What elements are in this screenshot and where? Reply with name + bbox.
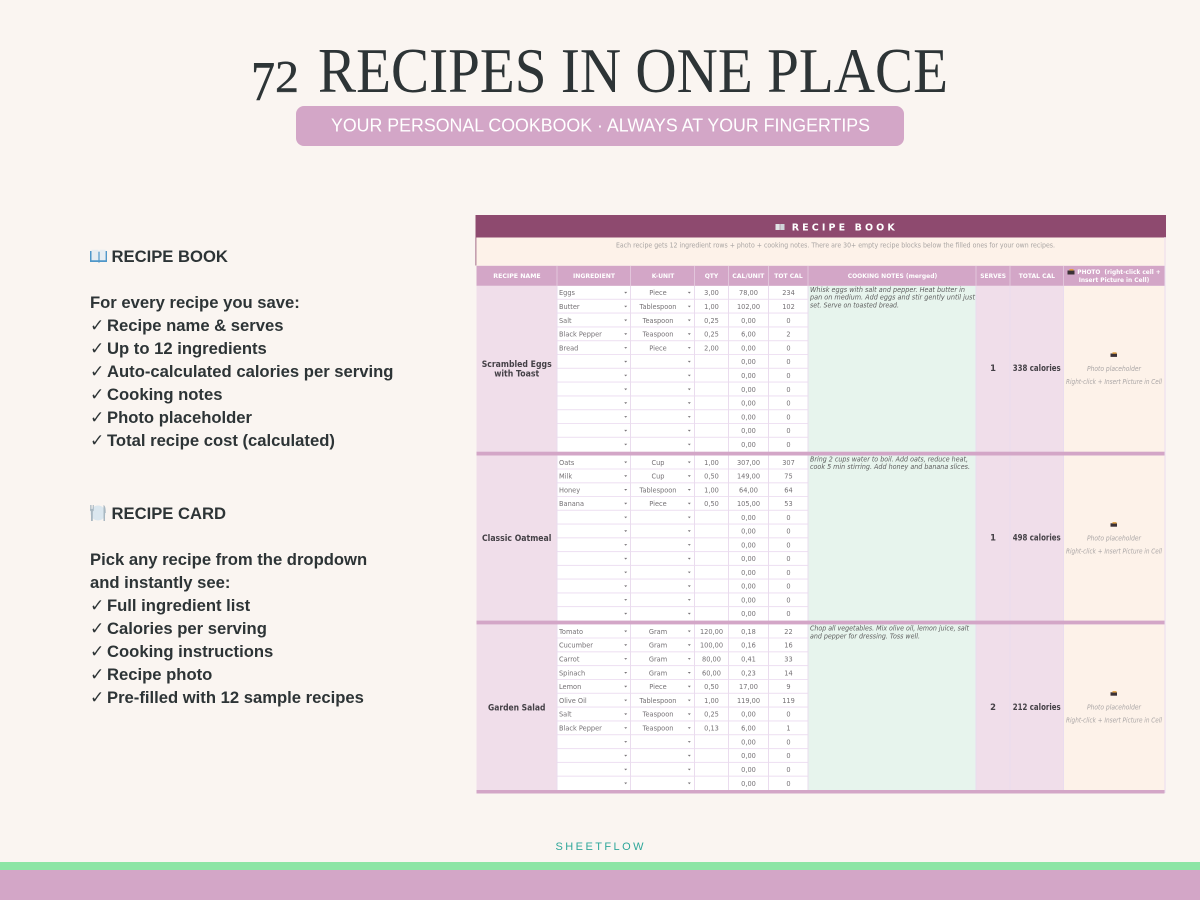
ingredient rows: 0,18 bbox=[741, 628, 756, 636]
ingredient rows: Eggs bbox=[559, 289, 576, 297]
text block: recipe book features: ✓ bbox=[90, 339, 104, 359]
ingredient rows: 0 bbox=[786, 569, 791, 577]
cooking notes bbox=[809, 286, 975, 309]
ingredient rows: Tomato bbox=[558, 628, 583, 636]
text block: recipe book features: Cooking notes bbox=[107, 385, 222, 404]
ingredient rows: Black Pepper bbox=[559, 331, 602, 339]
ingredient rows: Black Pepper bbox=[559, 724, 602, 732]
photo placeholder: Right-click + Insert Picture in Cell bbox=[1066, 716, 1162, 724]
recipe name bbox=[482, 359, 552, 379]
cooking notes: Bring 2 cups water to boil. Add oats, reduce heat, bbox=[810, 455, 968, 463]
text block: recipe book features: Recipe name & serves bbox=[107, 316, 284, 335]
ingredient rows: 0,50 bbox=[704, 473, 719, 481]
recipe block: scrambled eggs bbox=[482, 286, 1162, 449]
text block: recipe book features: Total recipe cost (calculated) bbox=[107, 431, 335, 450]
ingredient rows: 0,00 bbox=[741, 752, 756, 760]
serves and total calories: 1 bbox=[990, 363, 996, 373]
instruction note band: Each recipe gets 12 ingredient rows + photo + cooking notes. There are 30+ empty recipe blocks below the filled ones for your own recipes. bbox=[616, 241, 1055, 249]
ingredient rows: 17,00 bbox=[739, 683, 758, 691]
ingredient rows: Honey bbox=[559, 486, 580, 494]
ingredient rows: 0,00 bbox=[741, 528, 756, 536]
text block: recipe card features: ✓ bbox=[90, 665, 104, 685]
ingredient rows: Cup bbox=[652, 459, 664, 467]
ingredient rows: 14 bbox=[784, 669, 793, 677]
ingredient rows: 0 bbox=[786, 738, 791, 746]
table header row: CAL/UNIT bbox=[732, 273, 765, 280]
ingredient rows: Piece bbox=[649, 344, 667, 352]
ingredient rows: Lemon bbox=[559, 683, 581, 691]
ingredient rows: 0,00 bbox=[741, 413, 756, 421]
ingredient rows: Teaspoon bbox=[642, 331, 673, 339]
text block: recipe book features: ✓ bbox=[90, 408, 104, 428]
text block: recipe book features: ✓ bbox=[90, 431, 104, 451]
ingredient rows: 0,25 bbox=[704, 317, 719, 325]
ingredient rows: 0,25 bbox=[704, 711, 719, 719]
ingredient rows: 1 bbox=[786, 724, 791, 732]
photo placeholder: Photo placeholder bbox=[1087, 704, 1142, 712]
icon: fork and knife with plate bbox=[90, 505, 106, 521]
ingredient rows: 102,00 bbox=[737, 303, 760, 311]
ingredient rows: 0,00 bbox=[741, 711, 756, 719]
text block: recipe card features: Full ingredient list bbox=[107, 596, 251, 615]
ingredient rows: 0 bbox=[786, 528, 791, 536]
photo placeholder: Right-click + Insert Picture in Cell bbox=[1066, 378, 1162, 386]
ingredient rows: 1,00 bbox=[704, 303, 719, 311]
column backgrounds bbox=[476, 237, 1165, 793]
table header row: TOTAL CAL bbox=[1019, 273, 1055, 280]
ingredient rows: 0 bbox=[786, 780, 791, 788]
ingredient rows: 0,23 bbox=[741, 669, 756, 677]
ingredient rows: 119,00 bbox=[737, 697, 760, 705]
cooking notes: Whisk eggs with salt and pepper. Heat butter in bbox=[810, 286, 965, 294]
ingredient rows: 6,00 bbox=[741, 724, 756, 732]
title: 2 bbox=[275, 52, 299, 102]
ingredient rows: Oats bbox=[559, 459, 575, 467]
ingredient rows: 149,00 bbox=[737, 473, 760, 481]
cooking notes: and pepper for dressing. Toss well. bbox=[810, 632, 920, 640]
text block: recipe card features: and instantly see: bbox=[90, 573, 230, 592]
footer bands bbox=[0, 862, 1200, 900]
photo placeholder bbox=[1066, 352, 1162, 386]
ingredient rows: 0 bbox=[786, 583, 791, 591]
ingredient rows: 307 bbox=[782, 459, 795, 467]
serves and total calories bbox=[990, 532, 1061, 542]
recipe name: Classic Oatmeal bbox=[482, 533, 552, 543]
ingredient rows: 80,00 bbox=[702, 655, 721, 663]
ingredient rows bbox=[559, 459, 795, 618]
ingredient rows: 0,00 bbox=[741, 317, 756, 325]
ingredient rows: Piece bbox=[649, 683, 667, 691]
serves and total calories: 212 calories bbox=[1013, 702, 1061, 712]
ingredient rows: 6,00 bbox=[741, 331, 756, 339]
ingredient rows: Tablespoon bbox=[639, 303, 676, 311]
ingredient rows: Gram bbox=[649, 655, 667, 663]
sheet banner: RECIPE BOOK bbox=[792, 222, 895, 234]
ingredient rows: Gram bbox=[649, 669, 667, 677]
recipe name: Garden Salad bbox=[488, 702, 545, 712]
title: RECIPES IN ONE PLACE bbox=[318, 35, 948, 106]
ingredient rows: 0,00 bbox=[741, 555, 756, 563]
table header row: PHOTO (right-click cell + bbox=[1077, 269, 1161, 276]
ingredient rows: 0 bbox=[786, 317, 791, 325]
instruction note band bbox=[476, 238, 1166, 266]
subtitle pill bbox=[296, 106, 904, 146]
serves and total calories bbox=[990, 702, 1061, 712]
ingredient rows: 0,00 bbox=[741, 766, 756, 774]
ingredient rows: 0 bbox=[786, 372, 791, 380]
table header row: Insert Picture in Cell) bbox=[1079, 277, 1149, 284]
ingredient rows: 53 bbox=[784, 500, 793, 508]
block separator bbox=[476, 790, 1164, 794]
ingredient rows: 0,00 bbox=[741, 400, 756, 408]
table header row: INGREDIENT bbox=[573, 273, 616, 280]
ingredient rows: Tablespoon bbox=[639, 486, 676, 494]
serves and total calories: 2 bbox=[990, 702, 996, 712]
ingredient rows: Cup bbox=[652, 473, 664, 481]
ingredient rows: 16 bbox=[784, 642, 793, 650]
text block: recipe card features: ✓ bbox=[90, 596, 104, 616]
ingredient rows bbox=[558, 628, 795, 788]
ingredient rows: 0,00 bbox=[741, 780, 756, 788]
table header row: TOT CAL bbox=[774, 273, 803, 280]
ingredient rows: 3,00 bbox=[704, 289, 719, 297]
ingredient rows: 119 bbox=[782, 697, 795, 705]
ingredient rows: 0,25 bbox=[704, 331, 719, 339]
ingredient rows: 64 bbox=[784, 486, 793, 494]
title: 7 bbox=[251, 51, 275, 113]
table header row: QTY bbox=[705, 273, 719, 280]
table header row: K-UNIT bbox=[652, 273, 675, 280]
ingredient rows: 120,00 bbox=[700, 628, 723, 636]
ingredient rows: Tablespoon bbox=[639, 697, 676, 705]
cooking notes: pan on medium. Add eggs and stir gently until just bbox=[809, 294, 975, 302]
ingredient rows: 1,00 bbox=[704, 697, 719, 705]
text block: recipe book features bbox=[90, 247, 393, 451]
ingredient rows: 0 bbox=[786, 441, 791, 449]
ingredient rows: 0,13 bbox=[704, 724, 719, 732]
ingredient rows: 0 bbox=[786, 413, 791, 421]
ingredient rows: Cucumber bbox=[559, 642, 593, 650]
text block: recipe book features: Auto-calculated calories per serving bbox=[107, 362, 393, 381]
brand name: SHEETFLOW bbox=[556, 841, 644, 853]
text block: recipe book features: RECIPE BOOK bbox=[112, 247, 228, 266]
text block: recipe book features: ✓ bbox=[90, 385, 104, 405]
ingredient rows: 0,00 bbox=[741, 427, 756, 435]
ingredient rows: 0 bbox=[786, 766, 791, 774]
text block: recipe card features bbox=[90, 504, 367, 708]
text block: recipe book features: ✓ bbox=[90, 316, 104, 336]
photo placeholder: Photo placeholder bbox=[1087, 534, 1142, 542]
ingredient rows: Piece bbox=[649, 289, 667, 297]
ingredient rows: Milk bbox=[559, 473, 572, 481]
ingredient rows: Teaspoon bbox=[642, 724, 673, 732]
text block: recipe card features: Cooking instructions bbox=[107, 642, 273, 661]
cooking notes bbox=[810, 455, 970, 471]
ingredient rows: 0,00 bbox=[741, 386, 756, 394]
ingredient rows: Bread bbox=[559, 344, 578, 352]
serves and total calories: 338 calories bbox=[1013, 363, 1061, 373]
ingredient rows: 1,00 bbox=[704, 486, 719, 494]
icon: open book bbox=[90, 250, 107, 263]
ingredient rows: Spinach bbox=[559, 669, 585, 677]
ingredient rows: Salt bbox=[559, 711, 572, 719]
ingredient rows: 0,00 bbox=[741, 610, 756, 618]
cooking notes bbox=[810, 625, 969, 640]
table header row: RECIPE NAME bbox=[493, 273, 541, 280]
text block: recipe book features: For every recipe you save: bbox=[90, 293, 300, 312]
recipe name: with Toast bbox=[494, 369, 539, 379]
ingredient rows: 0 bbox=[786, 610, 791, 618]
ingredient rows: 0,00 bbox=[741, 372, 756, 380]
serves and total calories: 498 calories bbox=[1013, 532, 1061, 542]
ingredient rows: 0,50 bbox=[704, 683, 719, 691]
ingredient rows: 307,00 bbox=[737, 459, 760, 467]
ingredient rows: 0,16 bbox=[741, 642, 756, 650]
table header row: SERVES bbox=[980, 273, 1006, 280]
ingredient rows: Carrot bbox=[559, 655, 580, 663]
text block: recipe card features: ✓ bbox=[90, 688, 104, 708]
ingredient rows: 0 bbox=[786, 386, 791, 394]
ingredient rows: Teaspoon bbox=[642, 711, 673, 719]
ingredient rows: 102 bbox=[782, 303, 795, 311]
ingredient rows: 0 bbox=[786, 541, 791, 549]
ingredient rows: 0 bbox=[786, 514, 791, 522]
ingredient rows: 0 bbox=[786, 555, 791, 563]
ingredient rows: 100,00 bbox=[700, 642, 723, 650]
ingredient rows: 64,00 bbox=[739, 486, 758, 494]
sheet banner bbox=[476, 215, 1166, 238]
ingredient rows: 33 bbox=[784, 655, 793, 663]
text block: recipe card features: ✓ bbox=[90, 619, 104, 639]
ingredient rows: 2 bbox=[786, 331, 791, 339]
ingredient rows: 0 bbox=[786, 358, 791, 366]
ingredient rows: 0,00 bbox=[741, 344, 756, 352]
text block: recipe book features: ✓ bbox=[90, 362, 104, 382]
ingredient rows: 0,00 bbox=[741, 358, 756, 366]
text block: recipe card features: RECIPE CARD bbox=[112, 504, 226, 523]
ingredient rows: 22 bbox=[784, 628, 793, 636]
table header row bbox=[476, 266, 1164, 286]
ingredient rows: Gram bbox=[649, 642, 667, 650]
text block: recipe card features: Pick any recipe from the dropdown bbox=[90, 550, 367, 569]
ingredient rows: 0,00 bbox=[741, 541, 756, 549]
ingredient rows: 0 bbox=[786, 596, 791, 604]
ingredient rows: 0,00 bbox=[741, 514, 756, 522]
text block: recipe card features: Recipe photo bbox=[107, 665, 212, 684]
serves and total calories: 1 bbox=[990, 532, 996, 542]
ingredient rows: 0 bbox=[786, 400, 791, 408]
cooking notes: cook 5 min stirring. Add honey and banana slices. bbox=[810, 463, 970, 471]
text block: recipe card features: Calories per serving bbox=[107, 619, 267, 638]
block separator bbox=[476, 452, 1164, 456]
cooking notes: set. Serve on toasted bread. bbox=[810, 301, 899, 309]
ingredient rows: 0,00 bbox=[741, 738, 756, 746]
recipe block: classic oatmeal bbox=[482, 455, 1162, 618]
ingredient rows: 0,00 bbox=[741, 441, 756, 449]
block separator bbox=[476, 621, 1164, 624]
photo placeholder bbox=[1066, 691, 1162, 724]
ingredient rows: 0,00 bbox=[741, 583, 756, 591]
ingredient rows: 78,00 bbox=[739, 289, 758, 297]
ingredient rows bbox=[559, 289, 795, 449]
text block: recipe card features: ✓ bbox=[90, 642, 104, 662]
ingredient rows: 75 bbox=[784, 473, 793, 481]
spreadsheet: recipe book bbox=[476, 215, 1166, 794]
recipe name: Scrambled Eggs bbox=[482, 359, 552, 369]
ingredient rows: 1,00 bbox=[704, 459, 719, 467]
photo placeholder: Right-click + Insert Picture in Cell bbox=[1066, 548, 1162, 556]
text block: recipe card features: Pre-filled with 12 sample recipes bbox=[107, 688, 364, 707]
ingredient rows: Gram bbox=[649, 628, 667, 636]
recipe block: garden salad bbox=[488, 625, 1162, 788]
cooking notes: Chop all vegetables. Mix olive oil, lemon juice, salt bbox=[810, 625, 969, 633]
ingredient rows: 0 bbox=[786, 427, 791, 435]
ingredient rows: 60,00 bbox=[702, 669, 721, 677]
text block: recipe book features: Up to 12 ingredients bbox=[107, 339, 267, 358]
text block: recipe book features: Photo placeholder bbox=[107, 408, 253, 427]
table header row: COOKING NOTES (merged) bbox=[848, 273, 937, 280]
ingredient rows: 234 bbox=[782, 289, 795, 297]
photo placeholder bbox=[1066, 522, 1162, 556]
ingredient rows: 9 bbox=[786, 683, 791, 691]
ingredient rows: Teaspoon bbox=[642, 317, 673, 325]
ingredient rows: 0,00 bbox=[741, 569, 756, 577]
ingredient rows: 0,41 bbox=[741, 655, 756, 663]
ingredient rows: 105,00 bbox=[737, 500, 760, 508]
ingredient rows: 2,00 bbox=[704, 344, 719, 352]
ingredient rows: 0 bbox=[786, 711, 791, 719]
photo placeholder: Photo placeholder bbox=[1087, 365, 1142, 373]
ingredient rows: Butter bbox=[559, 303, 580, 311]
ingredient rows: 0 bbox=[786, 752, 791, 760]
ingredient rows: 0 bbox=[786, 344, 791, 352]
ingredient rows: Banana bbox=[559, 500, 584, 508]
serves and total calories bbox=[990, 363, 1061, 373]
ingredient rows: 0,00 bbox=[741, 596, 756, 604]
subtitle pill: YOUR PERSONAL COOKBOOK · ALWAYS AT YOUR FINGERTIPS bbox=[331, 116, 870, 136]
ingredient rows: Olive Oil bbox=[559, 697, 587, 705]
ingredient rows: Piece bbox=[649, 500, 667, 508]
ingredient rows: Salt bbox=[559, 317, 572, 325]
ingredient rows: 0,50 bbox=[704, 500, 719, 508]
